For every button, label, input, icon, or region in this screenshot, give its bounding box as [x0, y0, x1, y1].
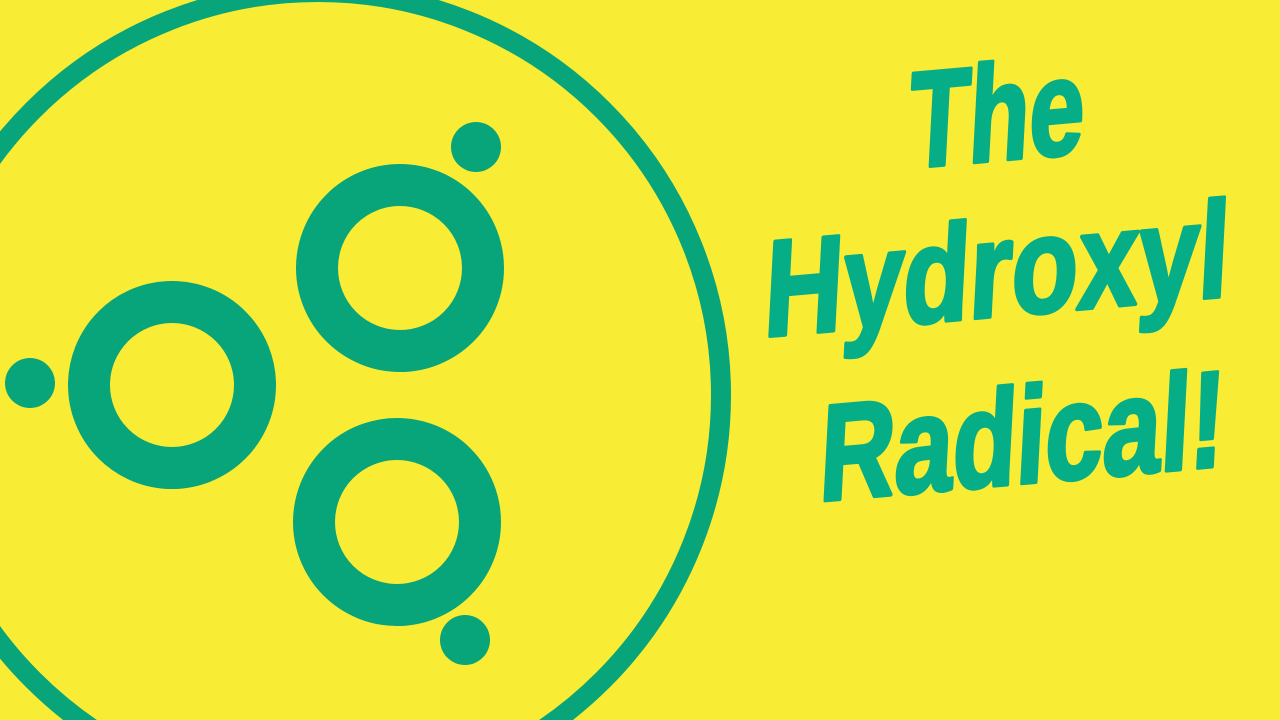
title: The: [906, 28, 1089, 197]
atom ring: bottom: [314, 439, 480, 605]
electron dot: top: [451, 122, 501, 172]
electron dot: left: [5, 358, 55, 408]
title: [748, 28, 1247, 530]
atom ring: left: [89, 302, 255, 468]
big enclosing ring: [0, 0, 721, 720]
atom ring: top: [317, 185, 483, 351]
electron dot: bottom: [440, 615, 490, 665]
icon: hydroxyl radical molecule: [0, 0, 721, 720]
